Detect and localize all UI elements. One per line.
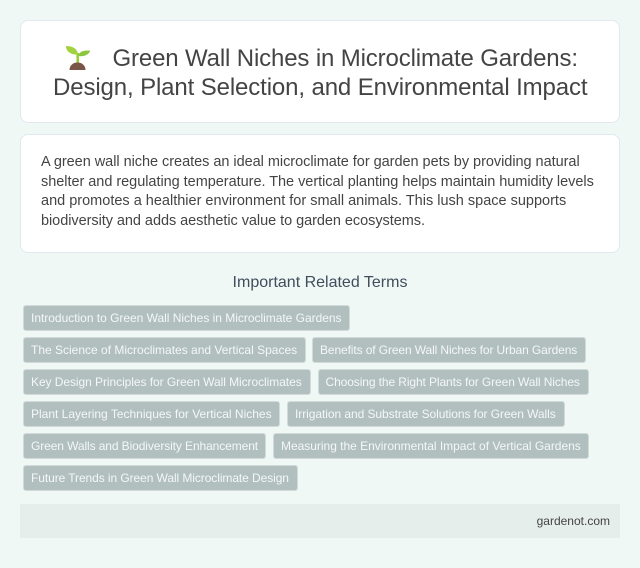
description text — [41, 154, 594, 229]
chip: Measuring the Environmental Impact of Vertical Gardens — [281, 439, 581, 453]
chip — [287, 401, 565, 427]
chip: Future Trends in Green Wall Microclimate Design — [31, 471, 289, 485]
title — [53, 45, 588, 101]
icon: seedling — [66, 46, 90, 70]
related terms heading: Important Related Terms — [233, 274, 407, 291]
header card — [20, 20, 620, 123]
description text: and promotes a healthier environment for small animals. This lush space supports — [41, 193, 566, 209]
chip — [23, 401, 280, 427]
description text: shelter and regulating temperature. The vertical planting helps maintain humidity levels — [41, 174, 594, 190]
chip: Introduction to Green Wall Niches in Microclimate Gardens — [31, 311, 342, 325]
chip: Choosing the Right Plants for Green Wall Niches — [326, 375, 580, 389]
chip — [23, 369, 311, 395]
footer bar — [20, 504, 620, 538]
chip — [318, 369, 588, 395]
chip — [312, 337, 586, 363]
chip: Green Walls and Biodiversity Enhancement — [31, 439, 258, 453]
chip: Benefits of Green Wall Niches for Urban Gardens — [320, 343, 577, 357]
description text: biodiversity and adds aesthetic value to garden ecosystems. — [41, 213, 425, 229]
title: Design, Plant Selection, and Environmental Impact — [53, 74, 587, 101]
chip — [23, 305, 350, 331]
chip — [23, 433, 266, 459]
title: Green Wall Niches in Microclimate Gardens: — [112, 45, 578, 72]
footer text: gardenot.com — [537, 514, 610, 528]
chip — [23, 337, 306, 363]
chip — [273, 433, 589, 459]
description text: A green wall niche creates an ideal microclimate for garden pets by providing natural — [41, 154, 580, 170]
chip: Plant Layering Techniques for Vertical Niches — [31, 407, 272, 421]
chip — [23, 465, 298, 491]
description card — [20, 134, 620, 253]
chip: Irrigation and Substrate Solutions for Green Walls — [295, 407, 556, 421]
chip: Key Design Principles for Green Wall Microclimates — [31, 375, 302, 389]
related terms chips — [23, 305, 589, 491]
chip: The Science of Microclimates and Vertical Spaces — [31, 343, 297, 357]
